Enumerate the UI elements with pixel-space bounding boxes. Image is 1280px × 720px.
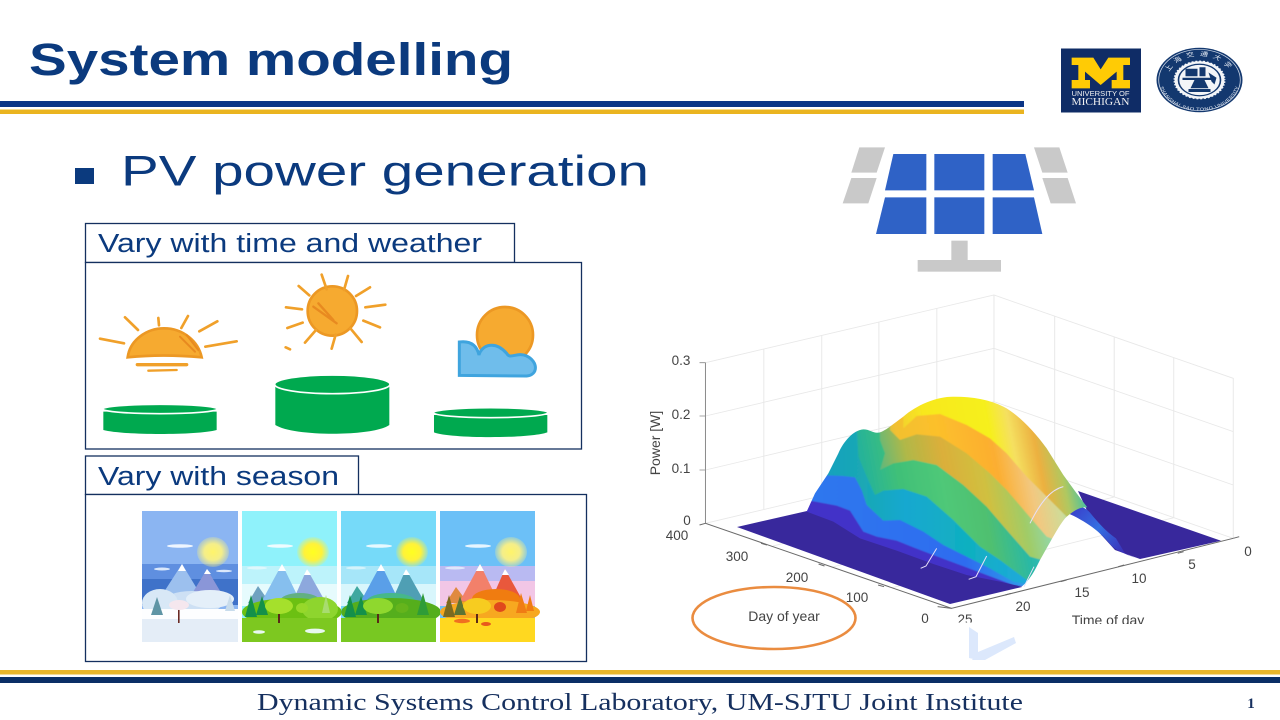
- header rule: [0, 101, 1024, 114]
- 3D surface chart: power by time of day and day of year: [647, 295, 1252, 660]
- axis tick labels: 0: [1244, 544, 1252, 559]
- axis tick labels: 15: [1074, 585, 1090, 600]
- panel: vary with season: [86, 456, 586, 662]
- axis tick labels: 20: [1015, 599, 1031, 614]
- heading: vary with time and weather: [86, 224, 514, 262]
- axis tick labels: 0.1: [672, 461, 690, 476]
- axis label: power: Power [W]: [647, 411, 663, 475]
- cylinder: low morning output: [103, 404, 217, 434]
- season: winter: [142, 511, 238, 642]
- heading: vary with time and weather: Vary with time and weather: [98, 230, 483, 258]
- axis tick labels: 25: [957, 612, 973, 627]
- axis tick labels: 100: [846, 590, 868, 605]
- axis label: day of year: Day of year: [748, 608, 820, 624]
- icon: solar panel: [843, 147, 1076, 272]
- page number: 1: [1247, 696, 1255, 712]
- logo: University of Michigan: UNIVERSITY OF: [1072, 91, 1130, 98]
- title: System modelling: [29, 34, 513, 85]
- logo: Shanghai Jiao Tong University seal: [1156, 48, 1242, 112]
- cylinder: low cloudy output: [433, 408, 548, 437]
- panel: vary with time and weather: [86, 224, 582, 449]
- chart axes box and grid: [700, 295, 1239, 608]
- axis tick labels: 400: [666, 528, 688, 543]
- footer rule: [0, 670, 1280, 683]
- season: autumn: [440, 511, 540, 642]
- axis tick labels: 0.3: [672, 353, 690, 368]
- footer text: Dynamic Systems Control Laboratory, UM-SJTU Joint Institute: [257, 690, 1023, 716]
- axis tick labels: 0.2: [672, 407, 690, 422]
- surface floor: back strip: [1078, 491, 1221, 559]
- callout: orange ellipse around day of year: [692, 587, 856, 649]
- bullet: PV power generation: PV power generation: [121, 148, 649, 196]
- frame: weather illustrations: [86, 262, 582, 449]
- heading: vary with season: [86, 456, 358, 494]
- axis label: time of day: Time of day: [1072, 612, 1144, 628]
- axis tick labels: 10: [1131, 571, 1147, 586]
- surface floor: front strip: [737, 511, 1022, 604]
- icon: midday sun: [286, 275, 385, 349]
- axis tick labels: 200: [786, 570, 808, 585]
- icon: rising sun: [100, 316, 237, 371]
- heading: vary with season: Vary with season: [98, 463, 339, 491]
- logo: University of Michigan: [1061, 48, 1141, 112]
- icon: faint watermark: [969, 627, 1016, 660]
- logo: Shanghai Jiao Tong University seal: SHANGHAI JIAO TONG UNIVERSITY: [1160, 86, 1239, 111]
- season: spring: [242, 511, 342, 642]
- bullet: PV power generation: [75, 148, 649, 196]
- icon: sun behind cloud: [459, 307, 535, 376]
- cylinder: high midday output: [275, 375, 390, 434]
- axis tick labels: 5: [1188, 557, 1196, 572]
- logo: University of Michigan: MICHIGAN: [1072, 97, 1130, 108]
- axis tick labels: 300: [726, 549, 748, 564]
- chart surface: [800, 390, 1137, 597]
- axis tick labels: [666, 353, 1252, 627]
- season: summer: [341, 511, 441, 642]
- frame: season illustrations: [86, 494, 586, 662]
- logo: Shanghai Jiao Tong University seal: 上海交通大学: [1165, 51, 1232, 72]
- axis tick labels: 0: [921, 611, 929, 626]
- axis tick labels: 0: [683, 513, 691, 528]
